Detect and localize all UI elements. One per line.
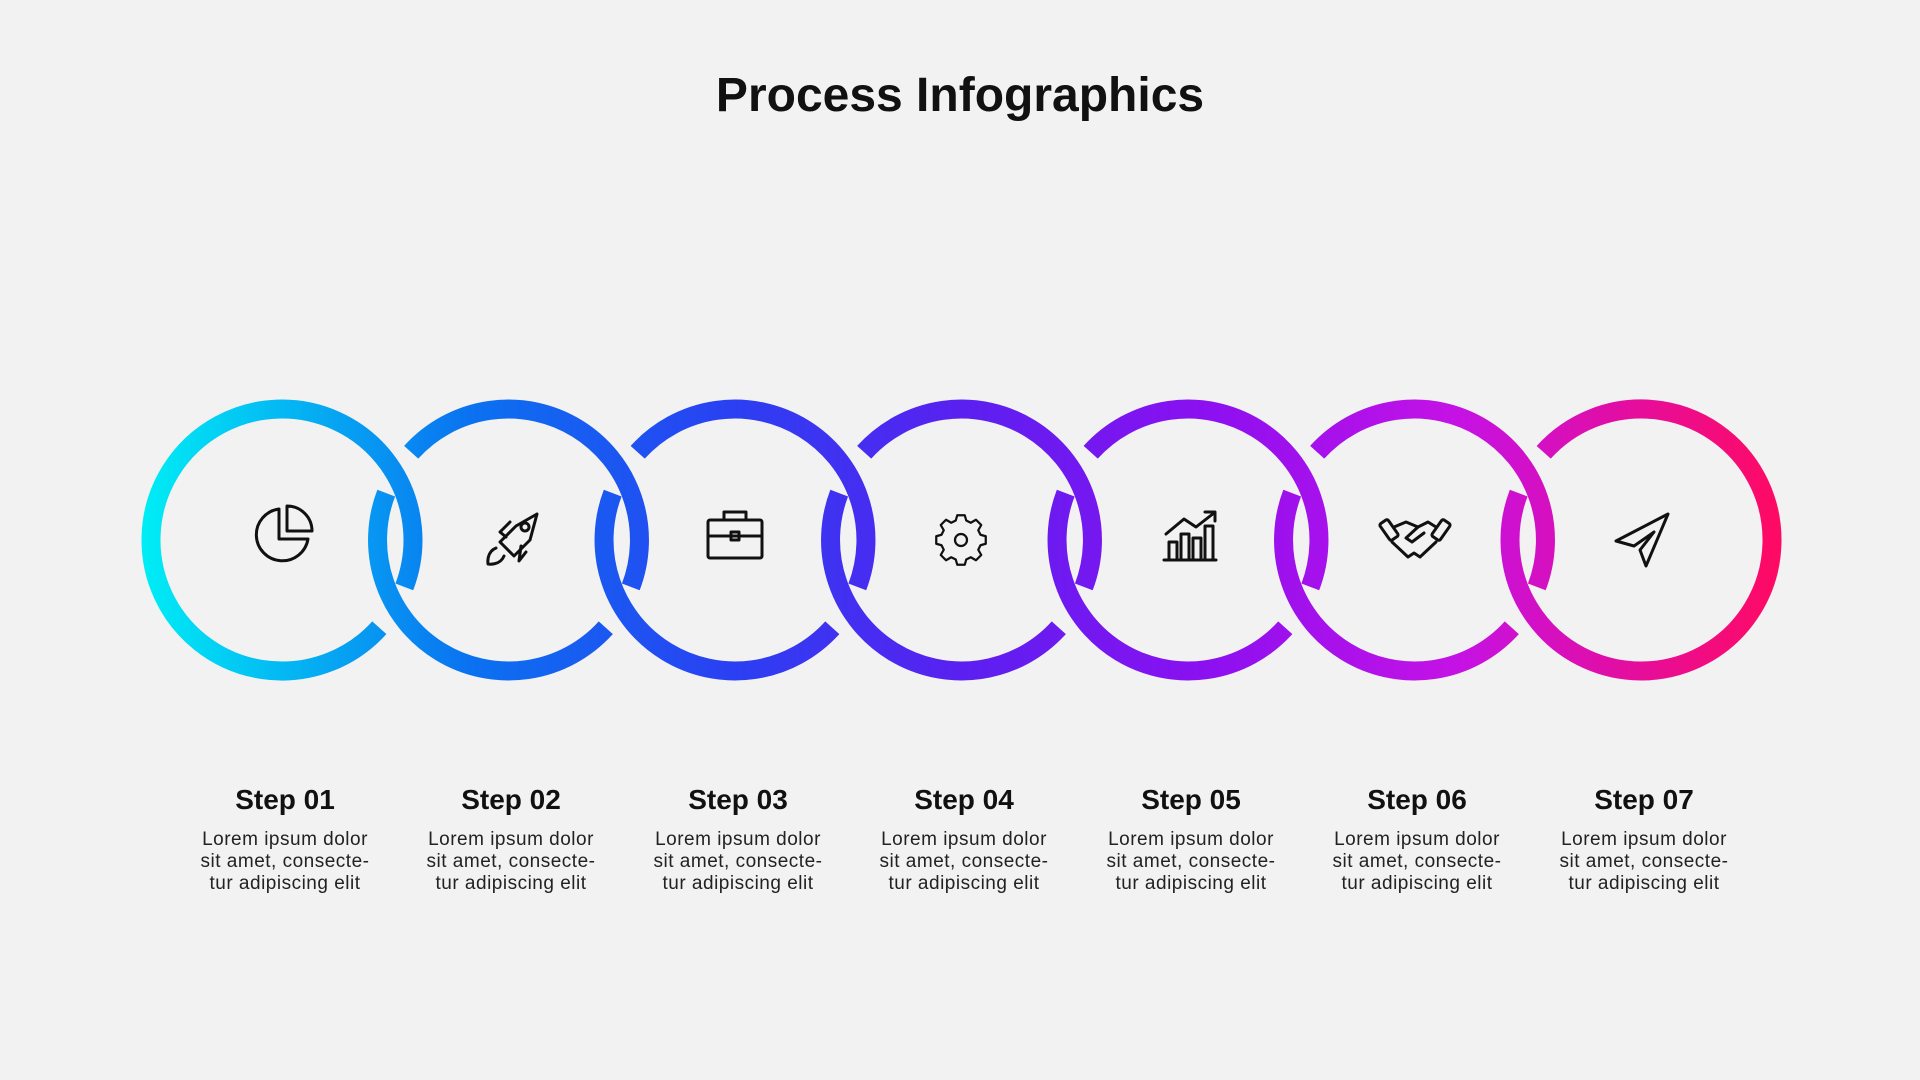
step 02: tur adipiscing elit [435,873,587,894]
circle 6 [1284,409,1545,671]
step 05: Lorem ipsum dolor [1108,829,1274,850]
step 02: Lorem ipsum dolor [428,829,594,850]
step 04: Step 04 [914,784,1014,815]
step 04: sit amet, consecte- [880,851,1048,872]
step 05: Step 05 [1141,784,1241,815]
circle 2 [378,409,639,671]
step 07: Step 07 [1594,784,1694,815]
step 03: sit amet, consecte- [654,851,822,872]
icon: bar chart growth [1164,512,1216,560]
step 03: tur adipiscing elit [662,873,814,894]
icon: gear [936,515,986,565]
circle 7 [1510,409,1772,671]
circle 4 [831,409,1092,671]
step 01: Step 01 [235,784,335,815]
step 06: tur adipiscing elit [1341,873,1493,894]
icon: handshake [1379,519,1451,557]
step 01: tur adipiscing elit [209,873,361,894]
step 02 [427,784,595,894]
step 06: Lorem ipsum dolor [1334,829,1500,850]
circle 5 [1057,409,1319,671]
step 04: Lorem ipsum dolor [881,829,1047,850]
icon: pie chart [256,506,312,561]
step 03: Step 03 [688,784,788,815]
step 07: Lorem ipsum dolor [1561,829,1727,850]
step 05 [1107,784,1275,894]
step 07 [1560,784,1728,894]
step 01: sit amet, consecte- [201,851,369,872]
step 06: Step 06 [1367,784,1467,815]
step 07: tur adipiscing elit [1568,873,1720,894]
circle 3 [604,409,866,671]
step 06: sit amet, consecte- [1333,851,1501,872]
step 05: sit amet, consecte- [1107,851,1275,872]
step 01: Lorem ipsum dolor [202,829,368,850]
step 04 [880,784,1048,894]
step 06 [1333,784,1501,894]
step 07: sit amet, consecte- [1560,851,1728,872]
icon: paper plane [1616,514,1668,566]
step 05: tur adipiscing elit [1115,873,1267,894]
circle 1 [151,409,413,671]
step 04: tur adipiscing elit [888,873,1040,894]
icon: rocket [488,514,537,564]
step 02: sit amet, consecte- [427,851,595,872]
step 03: Lorem ipsum dolor [655,829,821,850]
step 01 [201,784,369,894]
step 03 [654,784,822,894]
icon: briefcase [708,512,762,558]
step 02: Step 02 [461,784,561,815]
title: Process Infographics [716,69,1204,122]
